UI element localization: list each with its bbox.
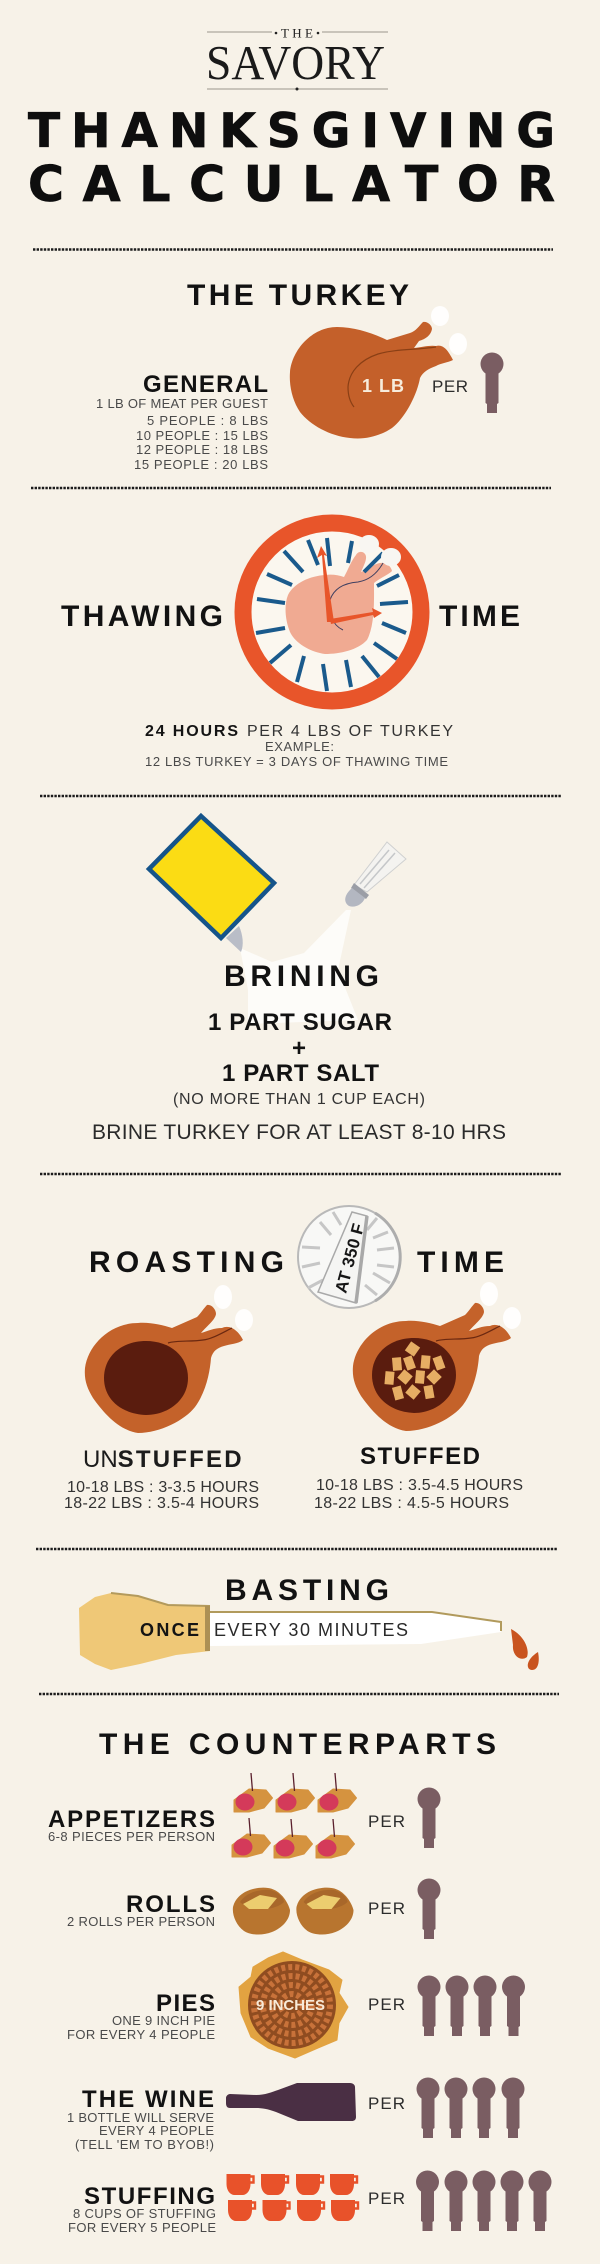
label: per: PER bbox=[368, 2189, 405, 2208]
row: appetizers bbox=[48, 1773, 440, 1858]
icon: turkey bbox=[290, 306, 467, 439]
title: THANKSGIVING bbox=[28, 104, 555, 159]
text block: unstuffed times: 10-18 LBS : 3-3.5 HOURS bbox=[67, 1479, 259, 1496]
icon: stuffed turkey bbox=[353, 1282, 521, 1431]
icon: oven dial bbox=[298, 1206, 400, 1308]
text: stuffing: 8 CUPS OF STUFFING bbox=[73, 2206, 216, 2221]
icon: cups bbox=[226, 2174, 358, 2221]
icon: pie: 9 INCHES bbox=[256, 1997, 325, 2014]
text block: stuffed times bbox=[314, 1443, 523, 1512]
icon: four people bbox=[418, 1976, 525, 2036]
icon: rolls bbox=[233, 1888, 354, 1935]
heading: thawing: THAWING bbox=[61, 600, 223, 633]
text: stuffing: FOR EVERY 5 PEOPLE bbox=[68, 2220, 216, 2235]
heading: the counterparts: THE COUNTERPARTS bbox=[99, 1728, 496, 1761]
text: stuffing bbox=[68, 2183, 216, 2235]
heading: time: TIME bbox=[417, 1246, 504, 1279]
logo: The Savory: THE bbox=[281, 26, 313, 40]
text block: unstuffed times bbox=[64, 1446, 259, 1512]
text block: general: 1 LB OF MEAT PER GUEST bbox=[96, 396, 268, 411]
text: the wine: (TELL 'EM TO BYOB!) bbox=[75, 2137, 214, 2152]
icon: pie bbox=[239, 1952, 348, 2058]
text block: unstuffed times: UNSTUFFED bbox=[83, 1446, 244, 1473]
panel: the turkey bbox=[96, 279, 504, 472]
text block: stuffed times: STUFFED bbox=[360, 1443, 480, 1470]
row: the wine bbox=[67, 2078, 524, 2152]
text block: stuffed times: 18-22 LBS : 4.5-5 HOURS bbox=[314, 1495, 509, 1512]
panel: the counterparts bbox=[48, 1728, 552, 2235]
pouring sugar and salt streams bbox=[240, 910, 358, 1024]
icon: person bbox=[480, 352, 504, 413]
label: per: PER bbox=[368, 2094, 405, 2113]
clock with turkey bbox=[243, 523, 421, 701]
icon: person bbox=[418, 1878, 440, 1939]
heading: basting: BASTING bbox=[225, 1574, 389, 1607]
text block: unstuffed times: 18-22 LBS : 3.5-4 HOURS bbox=[64, 1495, 259, 1512]
label: per: PER bbox=[368, 1899, 405, 1918]
text: the wine: 1 BOTTLE WILL SERVE bbox=[67, 2110, 214, 2125]
text: appetizers: APPETIZERS bbox=[48, 1806, 215, 1833]
text block: thawing rule bbox=[145, 723, 453, 769]
row: pies bbox=[67, 1952, 525, 2058]
icon: five people bbox=[416, 2170, 552, 2231]
heading: time: TIME bbox=[439, 600, 520, 633]
text block: general: 5 PEOPLE : 8 LBS bbox=[147, 413, 268, 428]
text: the wine: THE WINE bbox=[82, 2086, 214, 2113]
label: per: PER bbox=[432, 377, 468, 396]
text: rolls bbox=[67, 1891, 215, 1929]
logo: The Savory: SAVORY bbox=[206, 35, 385, 90]
text block: brining ratio: 1 PART SALT bbox=[222, 1060, 379, 1087]
icon: oven dial: AT 350 F bbox=[332, 1222, 368, 1295]
icon: turkey: 1 LB bbox=[362, 376, 404, 396]
text: the wine: EVERY 4 PEOPLE bbox=[99, 2123, 214, 2138]
text block: brining ratio: BRINE TURKEY FOR AT LEAST 8-10 HRS bbox=[92, 1121, 506, 1144]
text: basting frequency: ONCE bbox=[140, 1620, 199, 1640]
text: pies: ONE 9 INCH PIE bbox=[112, 2013, 215, 2028]
title bbox=[28, 104, 555, 213]
heading: the turkey: THE TURKEY bbox=[187, 279, 409, 312]
text: rolls: ROLLS bbox=[126, 1891, 215, 1918]
icon: wine bottle bbox=[226, 2083, 356, 2121]
text: pies bbox=[67, 1990, 215, 2042]
text block: general: 15 PEOPLE : 20 LBS bbox=[134, 457, 268, 472]
icon: baste drips bbox=[511, 1629, 539, 1670]
icon: appetizers bbox=[232, 1773, 356, 1858]
text block: brining ratio: 1 PART SUGAR bbox=[208, 1009, 392, 1036]
text block: thawing rule: PER 4 LBS OF TURKEY bbox=[247, 723, 453, 740]
text block: brining ratio: + bbox=[292, 1035, 306, 1062]
icon: sugar box bbox=[149, 816, 274, 952]
panel: basting bbox=[79, 1574, 539, 1670]
text block: thawing rule: EXAMPLE: bbox=[265, 739, 334, 754]
icon: four people bbox=[416, 2078, 524, 2138]
heading: brining: BRINING bbox=[224, 960, 379, 993]
row: rolls bbox=[67, 1878, 440, 1939]
text: pies: FOR EVERY 4 PEOPLE bbox=[67, 2027, 215, 2042]
panel: brining bbox=[92, 816, 506, 1144]
icon: salt shaker bbox=[345, 842, 406, 907]
text: rolls: 2 ROLLS PER PERSON bbox=[67, 1914, 215, 1929]
text block: thawing rule: 12 LBS TURKEY = 3 DAYS OF THAWING TIME bbox=[145, 754, 448, 769]
text block: thawing rule: 24 HOURS bbox=[145, 723, 238, 740]
text block: stuffed times: 10-18 LBS : 3.5-4.5 HOURS bbox=[316, 1477, 523, 1494]
text block: brining ratio: (NO MORE THAN 1 CUP EACH) bbox=[173, 1091, 425, 1108]
icon: person bbox=[418, 1788, 440, 1848]
text block: general bbox=[96, 371, 268, 472]
text: basting frequency: EVERY 30 MINUTES bbox=[214, 1620, 408, 1640]
text block: brining ratio bbox=[92, 1009, 506, 1144]
text block: general: GENERAL bbox=[143, 371, 268, 398]
label: per: PER bbox=[368, 1995, 405, 2014]
panel: thawing time bbox=[61, 523, 520, 769]
text block: general: 12 PEOPLE : 18 LBS bbox=[136, 442, 268, 457]
row: stuffing bbox=[68, 2170, 552, 2235]
text: appetizers: 6-8 PIECES PER PERSON bbox=[48, 1829, 215, 1844]
label: per: PER bbox=[368, 1812, 405, 1831]
text: stuffing: STUFFING bbox=[84, 2183, 215, 2210]
title: CALCULATOR bbox=[28, 156, 555, 213]
panel: roasting time bbox=[64, 1206, 523, 1512]
text block: general: 10 PEOPLE : 15 LBS bbox=[136, 428, 268, 443]
icon: baster bbox=[79, 1593, 501, 1670]
text: the wine bbox=[67, 2086, 214, 2152]
icon: unstuffed turkey bbox=[85, 1285, 253, 1433]
heading: roasting: ROASTING bbox=[89, 1246, 284, 1279]
text: pies: PIES bbox=[156, 1990, 215, 2017]
